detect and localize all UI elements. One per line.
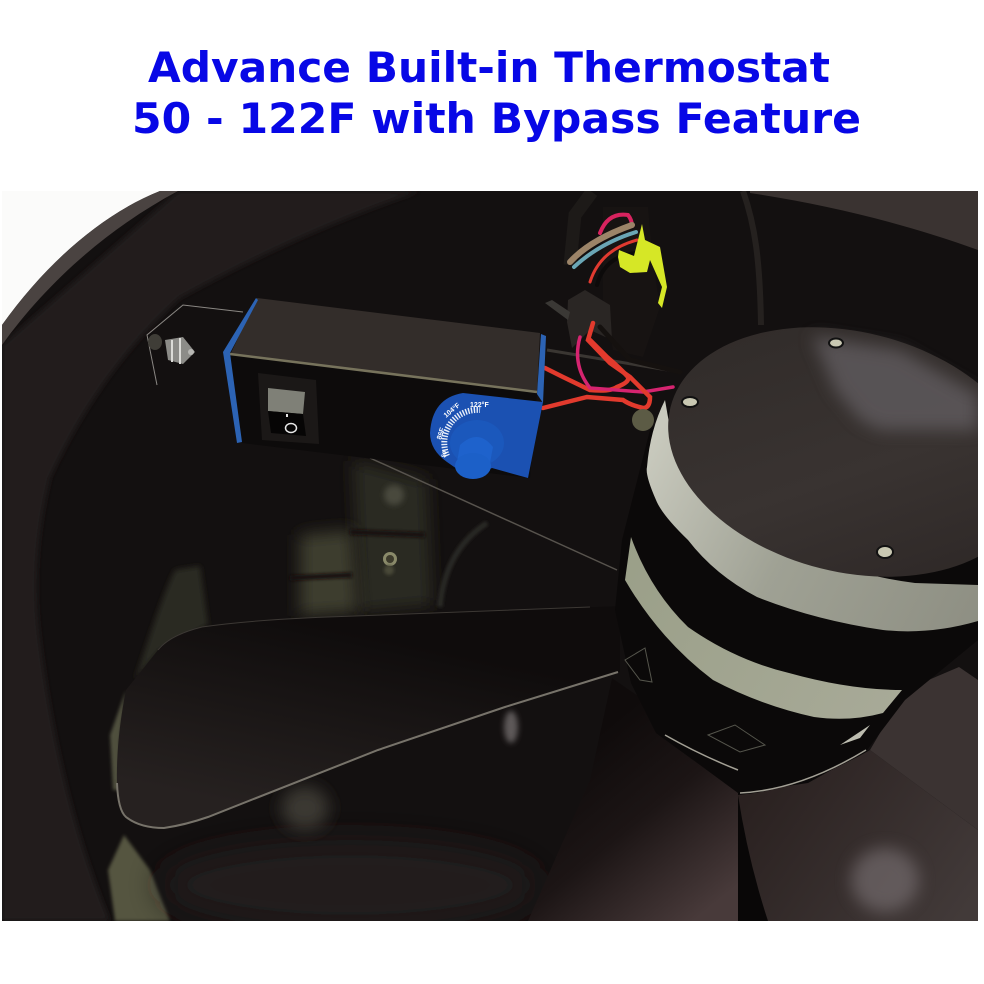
lower right fan blade (738, 750, 978, 921)
temperature scale: 86F (436, 426, 447, 441)
disc screw left (682, 397, 698, 407)
white corner outside housing (2, 191, 160, 325)
temperature scale (436, 401, 489, 459)
clip on hub left (625, 648, 652, 682)
photo: thermostat inside fan housing (2, 191, 984, 930)
disc screw bottom (877, 546, 893, 558)
clip on hub bottom (708, 725, 765, 752)
mounting arm (370, 458, 617, 570)
rocker switch (258, 373, 319, 444)
blue right end cap (537, 334, 546, 403)
blue knob (450, 420, 504, 479)
housing inner band left (2, 191, 420, 921)
yellow wire clip (618, 224, 667, 308)
disc screw top (829, 338, 843, 348)
connector tab (545, 300, 570, 320)
title: Advance Built-in Thermostat (148, 43, 830, 92)
motor black body (618, 438, 978, 793)
control connector block (603, 207, 660, 357)
temperature scale: 104°F (442, 401, 462, 420)
red and magenta wires (543, 323, 680, 408)
blue left end cap (223, 298, 258, 443)
soft reflections in housing (108, 460, 540, 930)
metal bolt near motor (632, 409, 654, 431)
cross brace bars (547, 350, 680, 372)
upper silver band (647, 400, 978, 631)
blade bright lower edge (117, 672, 618, 828)
blue dial plate (430, 393, 543, 478)
multicolor wire bundle (570, 215, 638, 285)
hub white mark (840, 725, 870, 745)
brushed highlight on disc (812, 336, 978, 430)
fan motor (615, 291, 984, 793)
top disc (668, 327, 978, 577)
far right fan blade (870, 667, 978, 830)
box front face (230, 355, 537, 478)
title (132, 43, 861, 143)
hub bright lower line (665, 735, 866, 793)
box edge highlight (230, 354, 537, 392)
mounting bracket with nut (147, 305, 243, 385)
black plug connector (567, 290, 612, 348)
wire sleeve (570, 192, 592, 265)
small screw on back wall (383, 552, 397, 575)
temperature scale: 50 (441, 450, 449, 459)
temperature scale: 122°F (470, 401, 489, 409)
title: 50 - 122F with Bypass Feature (132, 94, 861, 143)
lower silver band (625, 537, 902, 719)
blade reflection spot (504, 711, 518, 743)
housing rim (2, 191, 178, 345)
blade highlight (851, 848, 919, 912)
power cable (743, 191, 761, 325)
lower middle fan blade (528, 764, 738, 921)
blade thin top edge (158, 607, 590, 650)
thermostat control box (223, 298, 546, 479)
main upper fan blade (117, 616, 393, 827)
housing upper right wall (750, 191, 978, 250)
box top face (230, 298, 540, 393)
